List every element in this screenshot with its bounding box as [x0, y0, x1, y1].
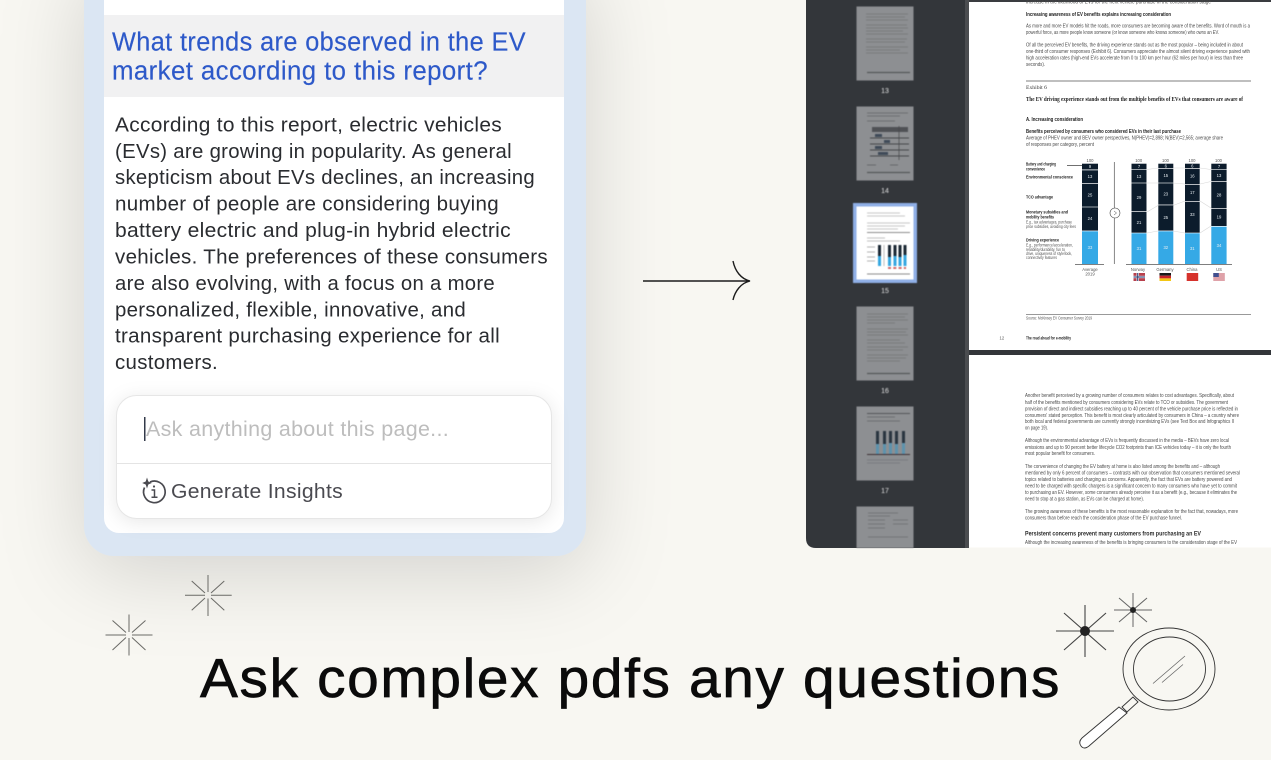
bar: Norway: 13 [1137, 174, 1142, 179]
icon: sparkle left upper [185, 575, 232, 616]
chart category labels: Driving experience [1026, 238, 1059, 242]
thumbnail page 16 [856, 306, 914, 380]
stacked bar chart: Average [1082, 267, 1098, 272]
chart category labels: mobility benefits [1026, 214, 1054, 220]
page two body text [1025, 393, 1240, 546]
bar: average 2019: 33 [1088, 245, 1093, 250]
bar: Norway: 31 [1137, 246, 1142, 251]
answer text: battery electric and plug-in hybrid electric [115, 220, 511, 242]
pdf page one [969, 0, 1271, 350]
bar: Germany: 100 [1162, 158, 1170, 163]
page one footer: Source: McKinsey EV Consumer Survey 2019 [1026, 316, 1093, 320]
page two body text: need to stop at a gas station, as EVs can be charged at home). [1025, 496, 1144, 502]
viewer dark background [806, 0, 1271, 548]
page two body text: consumers than before reach the consideration phase of the EV purchase funnel. [1025, 516, 1182, 522]
bar: Germany: 23 [1163, 192, 1169, 196]
flag: US [1213, 273, 1225, 281]
answer text: number of people are considering buying [115, 194, 499, 216]
country labels [1131, 267, 1222, 272]
answer text: customers. [115, 352, 218, 374]
bar: US: 28 [1217, 192, 1222, 198]
page number 14: 14 [881, 188, 889, 195]
question band [104, 15, 564, 97]
input card [116, 396, 552, 518]
thumbnail page 14 [856, 106, 914, 180]
chart category labels: price subsidies, avoiding city fees [1026, 224, 1076, 229]
bar: Norway: 7 [1138, 164, 1141, 169]
icon: insights info sparkle [142, 478, 165, 503]
chart heading: of responses per category, percent [1026, 142, 1094, 148]
chart category labels: reliability/durability, fun to [1026, 247, 1066, 252]
chart heading: Benefits perceived by consumers who considered EVs in their last purchase [1026, 129, 1181, 135]
bar: Norway [1132, 158, 1146, 264]
generate insights label: Generate Insights [171, 480, 343, 503]
bar: US: 7 [1218, 164, 1221, 169]
viewer bottom edge [969, 548, 1271, 560]
bar: China [1185, 158, 1200, 264]
icon: magnifying glass [1080, 628, 1215, 748]
chart category labels: Battery and charging [1026, 162, 1056, 166]
answer text: are also evolving, with a focus on a more [115, 273, 495, 295]
page one footer [1000, 314, 1251, 340]
thumbnail page 17 [856, 406, 914, 480]
bar: China: 6 [1191, 164, 1194, 168]
bar: Germany: 32 [1163, 245, 1169, 250]
bar: China: 33 [1190, 212, 1195, 217]
answer text: personalized, flexible, innovative, and [115, 300, 466, 322]
country labels: Norway [1131, 267, 1146, 272]
answer text: transparent purchasing experience for all [115, 326, 500, 348]
bar: Germany: 6 [1165, 164, 1168, 168]
page one body text: Increasing awareness of EV benefits explains increasing consideration [1026, 12, 1171, 18]
bar: average 2019: 9 [1089, 164, 1092, 169]
phone white screen [104, 0, 564, 533]
bar: China: 31 [1190, 246, 1195, 251]
question heading: What trends are observed in the EV [112, 28, 526, 56]
question heading: market according to this report? [112, 58, 488, 86]
pdf page two [969, 355, 1271, 548]
bar: average 2019: 24 [1088, 216, 1093, 221]
chart category labels: Monetary subsidies and [1026, 210, 1068, 214]
exhibit heading [1026, 85, 1244, 103]
comparison divider [1113, 162, 1115, 264]
chart heading [1026, 117, 1223, 148]
exhibit heading: Exhibit 6 [1026, 85, 1047, 91]
answer text: (EVs) are growing in popularity. As general [115, 141, 512, 163]
phone blue frame [84, 0, 586, 556]
bar: China: 100 [1188, 158, 1196, 163]
bar: US: 34 [1217, 243, 1222, 248]
chart category labels: TCO advantage [1026, 194, 1053, 200]
flag: Germany [1160, 273, 1171, 281]
thumbnail page 13 [856, 6, 914, 80]
bar: US: 100 [1215, 158, 1223, 163]
page number 16: 16 [881, 388, 889, 395]
bar: Germany: 15 [1163, 173, 1169, 178]
page two body text: The convenience of changing the EV battery at home is also listed among the benefits and – although [1025, 464, 1220, 470]
bar: Germany: 25 [1163, 215, 1169, 220]
thumbnails sidebar [853, 6, 917, 548]
bar: China: 16 [1190, 174, 1195, 178]
country labels: US [1216, 267, 1222, 272]
bar: average 2019: 13 [1088, 174, 1093, 179]
connectors [1147, 168, 1211, 233]
sidebar divider [965, 0, 969, 548]
icon: sparkle left lower [106, 614, 152, 656]
flag: Norway [1134, 273, 1145, 281]
icon: sparkle right large [1056, 605, 1114, 657]
page number 15: 15 [881, 288, 889, 295]
bar: Norway: 29 [1137, 195, 1142, 200]
chart heading: Average of PHEV owner and BEV owner perspectives, N(PHEV)=2,898; N(BEV)=2,565; average share [1026, 136, 1223, 142]
bar: average 2019: 100 [1086, 158, 1094, 163]
chart category labels: E.g., tax advantages, purchase [1026, 220, 1073, 224]
thumbnail page 15 selected [853, 203, 917, 283]
panel: pdf viewer [806, 0, 1271, 560]
country labels: Germany [1156, 267, 1175, 272]
page two body text: on page 19). [1025, 426, 1048, 432]
page one body text: seconds). [1026, 62, 1045, 68]
bar: average 2019: 25 [1088, 192, 1093, 198]
page two body text: most popular benefit for consumers. [1025, 451, 1095, 457]
input placeholder: Ask anything about this page... [146, 417, 449, 441]
stacked bar chart: 2019 [1085, 272, 1095, 276]
thumbnail page 18 [856, 506, 914, 548]
bar: US: 13 [1217, 173, 1222, 178]
answer text: skepticism about EVs declines, an increasing [115, 167, 535, 189]
chart category labels: E.g., performance/acceleration, [1026, 242, 1073, 248]
chart category labels: connectivity features [1026, 255, 1057, 260]
page one body text [1026, 0, 1250, 68]
question heading [112, 28, 526, 86]
bar: Germany [1158, 158, 1173, 264]
flag: China [1187, 273, 1198, 281]
country labels: China [1187, 267, 1198, 272]
page number 13: 13 [881, 88, 889, 95]
chart category labels: Environmental conscience [1026, 174, 1073, 180]
page one footer: The road ahead for e-mobility [1026, 336, 1071, 340]
page number 17: 17 [881, 488, 889, 495]
bar: Norway: 100 [1135, 158, 1143, 163]
page two body text: Persistent concerns prevent many customers from purchasing an EV [1025, 530, 1201, 538]
page two body text: half of the benefits mentioned by consumers considering EVs relate to TCO or subsidies. The government [1025, 400, 1228, 406]
title: Ask complex pdfs any questions [200, 647, 1061, 709]
text caret [144, 417, 146, 441]
panel: phone chat [84, 0, 586, 556]
icon: sparkle right small [1114, 593, 1152, 627]
answer text: vehicles. The preferences of these consumers [115, 246, 548, 268]
bar: average 2019 [1082, 158, 1098, 264]
bar: US: 19 [1217, 214, 1222, 220]
bar: China: 17 [1190, 190, 1195, 195]
arrow [643, 261, 750, 300]
bar: Norway: 21 [1137, 220, 1142, 225]
answer text: According to this report, electric vehicles [115, 114, 502, 136]
answer text [115, 114, 548, 374]
chart category labels: convenience [1026, 166, 1045, 172]
page one footer: 12 [1000, 336, 1005, 340]
chart heading: A. Increasing consideration [1026, 117, 1083, 123]
chart category labels [1026, 162, 1082, 260]
bar: US [1211, 158, 1227, 264]
chart category labels: drive, uniqueness of style/look, [1026, 251, 1072, 256]
stacked bar chart [1075, 158, 1232, 281]
